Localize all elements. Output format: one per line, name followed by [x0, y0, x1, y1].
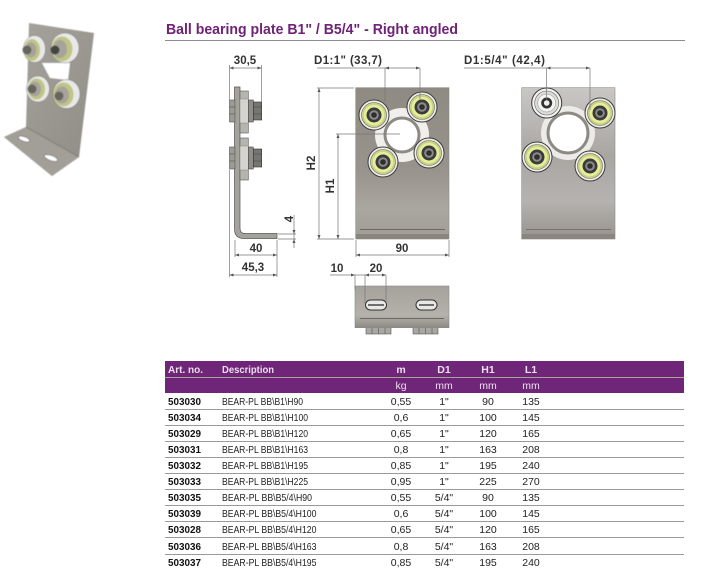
row 503033: BEAR-PL BB\B1\H225: [222, 476, 308, 488]
row 503028: 5/4": [435, 524, 453, 536]
table: [165, 361, 684, 569]
row 503029: [165, 428, 684, 442]
row 503036: 0,8: [394, 541, 408, 553]
row 503035: [165, 492, 684, 506]
row 503035: BEAR-PL BB\B5/4\H90: [222, 492, 312, 504]
bottom view drawing: [330, 263, 449, 334]
dimension: 45,3: [230, 170, 277, 277]
row 503032: BEAR-PL BB\B1\H195: [222, 460, 308, 472]
row 503034: 1": [439, 412, 449, 424]
dimension: 20: 20: [370, 263, 382, 275]
dimension: 4: 4: [284, 215, 296, 222]
row 503032: 240: [522, 460, 540, 472]
row 503036: 503036: [168, 541, 201, 553]
row 503033: 270: [522, 476, 540, 488]
row 503031: BEAR-PL BB\B1\H163: [222, 444, 308, 456]
row 503039: [165, 508, 684, 522]
row 503029: 1": [439, 428, 449, 440]
side view drawing: [230, 55, 296, 277]
dimension: H1: [325, 134, 400, 239]
dimension: D1 1 inch: D1:1" (33,7): [314, 55, 382, 67]
row 503034: [165, 412, 684, 426]
row 503028: 120: [479, 524, 497, 536]
row 503039: 5/4": [435, 508, 453, 520]
dimension: 90: 90: [396, 243, 408, 255]
row 503035: 90: [482, 492, 494, 504]
dimension: 40: [235, 240, 277, 257]
table header: L1: [525, 364, 537, 376]
row 503032: 1": [439, 460, 449, 472]
row 503037: [168, 557, 540, 569]
table header: Art. no.: [168, 364, 203, 376]
row 503029: 503029: [168, 428, 201, 440]
table header: mm: [435, 380, 453, 392]
dimension: H1: H1: [325, 178, 337, 193]
row 503036: 5/4": [435, 541, 453, 553]
row 503032: [165, 460, 684, 474]
row 503029: 120: [479, 428, 497, 440]
dimension: 10: 10: [331, 263, 343, 275]
table header: [165, 361, 684, 393]
table header: Description: [222, 364, 274, 376]
dimension: D1 5/4 inch: D1:5/4" (42,4): [464, 55, 545, 67]
row 503035: 0,55: [391, 492, 411, 504]
dimension: H2: [306, 88, 354, 239]
title: Ball bearing plate B1" / B5/4" - Right angled: [166, 21, 458, 38]
row 503036: [165, 541, 684, 554]
row 503035: 5/4": [435, 492, 453, 504]
row 503031: 163: [479, 444, 497, 456]
row 503032: 503032: [168, 460, 201, 472]
row 503033: 1": [439, 476, 449, 488]
row 503035: 135: [522, 492, 540, 504]
row 503039: 100: [479, 508, 497, 520]
row 503030: BEAR-PL BB\B1\H90: [222, 396, 303, 408]
row 503033: [165, 476, 684, 490]
table header: H1: [481, 364, 495, 376]
row 503033: 225: [479, 476, 497, 488]
row 503037: 195: [479, 557, 497, 569]
row 503028: [165, 524, 684, 538]
row 503034: 503034: [168, 412, 201, 424]
row 503028: 503028: [168, 524, 201, 536]
row 503031: 503031: [168, 444, 201, 456]
row 503030: [165, 396, 684, 410]
photo: bearing plate: [4, 23, 94, 176]
dimension: 90: [356, 240, 449, 257]
row 503033: 0,95: [391, 476, 411, 488]
row 503029: BEAR-PL BB\B1\H120: [222, 428, 308, 440]
row 503039: 145: [522, 508, 540, 520]
table header: kg: [395, 380, 407, 392]
row 503030: 90: [482, 396, 494, 408]
row 503039: BEAR-PL BB\B5/4\H100: [222, 508, 317, 520]
dimension: 45,3: 45,3: [242, 262, 264, 274]
dimension: D1 1 inch: [314, 55, 420, 102]
row 503037: 503037: [168, 557, 201, 569]
table header: mm: [479, 380, 497, 392]
row 503030: 503030: [168, 396, 201, 408]
table header: m: [396, 364, 406, 376]
row 503030: 1": [439, 396, 449, 408]
dimension: 40: 40: [250, 243, 262, 255]
row 503036: BEAR-PL BB\B5/4\H163: [222, 541, 317, 553]
row 503035: 503035: [168, 492, 201, 504]
dimension: D1 5/4 inch: [464, 55, 590, 110]
row 503031: 0,8: [394, 444, 408, 456]
row 503037: 5/4": [435, 557, 453, 569]
row 503039: 503039: [168, 508, 201, 520]
row 503032: 0,85: [391, 460, 411, 472]
row 503029: 165: [522, 428, 540, 440]
table header: mm: [522, 380, 540, 392]
dimension: 4: [278, 215, 296, 248]
table header: D1: [437, 364, 451, 376]
row 503030: 0,55: [391, 396, 411, 408]
row 503031: 208: [522, 444, 540, 456]
row 503034: 0,6: [394, 412, 408, 424]
dimension: 30,5: 30,5: [234, 55, 257, 67]
row 503037: BEAR-PL BB\B5/4\H195: [222, 557, 317, 569]
row 503034: 145: [522, 412, 540, 424]
row 503028: BEAR-PL BB\B5/4\H120: [222, 524, 317, 536]
row 503034: 100: [479, 412, 497, 424]
row 503028: 0,65: [391, 524, 411, 536]
row 503039: 0,6: [394, 508, 408, 520]
front view: D1 5/4 inch: [464, 55, 615, 239]
row 503037: 240: [522, 557, 540, 569]
row 503034: BEAR-PL BB\B1\H100: [222, 412, 308, 424]
row 503031: [165, 444, 684, 458]
row 503036: 163: [479, 541, 497, 553]
dimension: H2: H2: [306, 156, 318, 170]
row 503031: 1": [439, 444, 449, 456]
row 503032: 195: [479, 460, 497, 472]
dimension: 30,5: [230, 55, 262, 102]
row 503030: 135: [522, 396, 540, 408]
row 503037: 0,85: [391, 557, 411, 569]
row 503036: 208: [522, 541, 540, 553]
row 503028: 165: [522, 524, 540, 536]
front view: D1 1 inch: [306, 55, 449, 257]
row 503033: 503033: [168, 476, 201, 488]
row 503029: 0,65: [391, 428, 411, 440]
